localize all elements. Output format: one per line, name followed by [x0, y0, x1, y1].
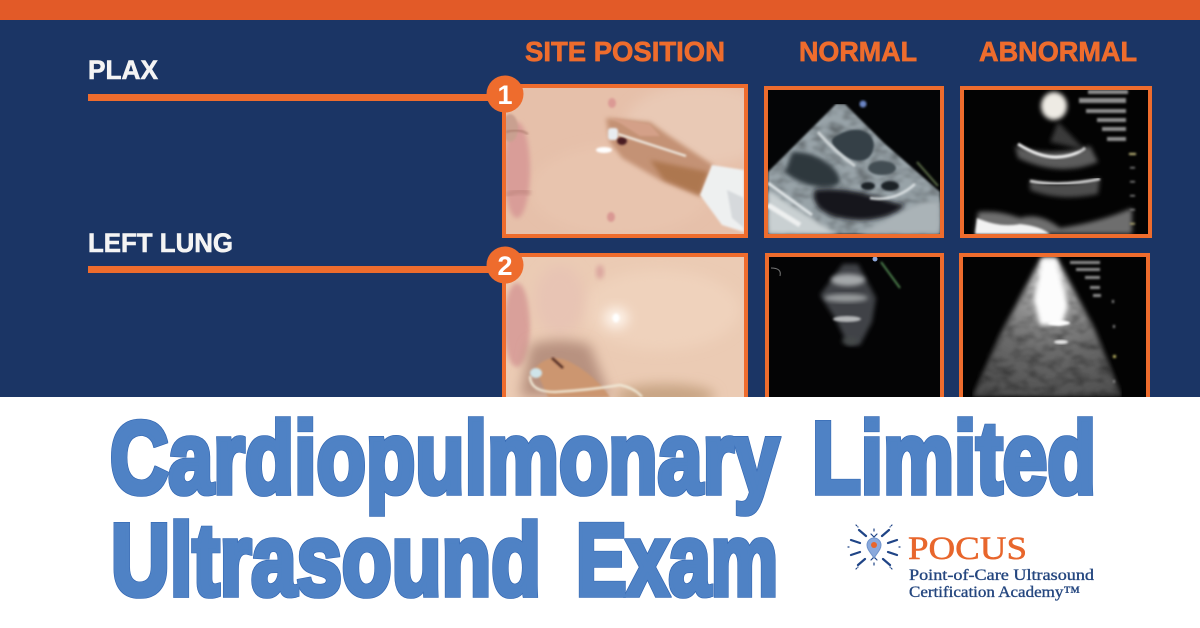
site position photo 1: [502, 84, 775, 238]
column headings: [525, 36, 1137, 67]
logo wordmark: POCUS: [908, 531, 1027, 567]
title: Ultrasound: [111, 503, 541, 617]
logo tagline: Certification Academy™: [909, 584, 1080, 601]
POCUS logo: [848, 525, 1094, 601]
column headings: SITE POSITION: [525, 36, 725, 67]
site position photo 2: [502, 253, 748, 408]
row label: LEFT LUNG: LEFT LUNG: [88, 228, 233, 258]
icon: location pin with radiating rays: [848, 525, 900, 569]
title: Cardiopulmonary: [110, 401, 779, 515]
number badge 1 with connector line: [88, 76, 524, 112]
column headings: ABNORMAL: [979, 36, 1137, 67]
normal left lung ultrasound: [765, 253, 944, 397]
navy background panel: [0, 0, 1200, 397]
column headings: NORMAL: [799, 36, 917, 67]
title: Limited: [812, 401, 1096, 515]
abnormal PLAX ultrasound: [960, 86, 1152, 238]
row label: PLAX: PLAX: [88, 55, 158, 85]
white title panel: [0, 397, 1200, 628]
logo tagline: [909, 567, 1094, 601]
abnormal left lung ultrasound: [959, 253, 1150, 397]
title: Exam: [576, 503, 778, 617]
normal PLAX ultrasound: [764, 86, 944, 238]
number badge 1 with connector line: 1: [497, 80, 513, 110]
title: [110, 401, 1096, 617]
top orange bar: [0, 0, 1200, 20]
number badge 2 with connector line: 2: [497, 251, 513, 281]
logo tagline: Point-of-Care Ultrasound: [909, 567, 1094, 584]
number badge 2 with connector line: [88, 246, 524, 284]
